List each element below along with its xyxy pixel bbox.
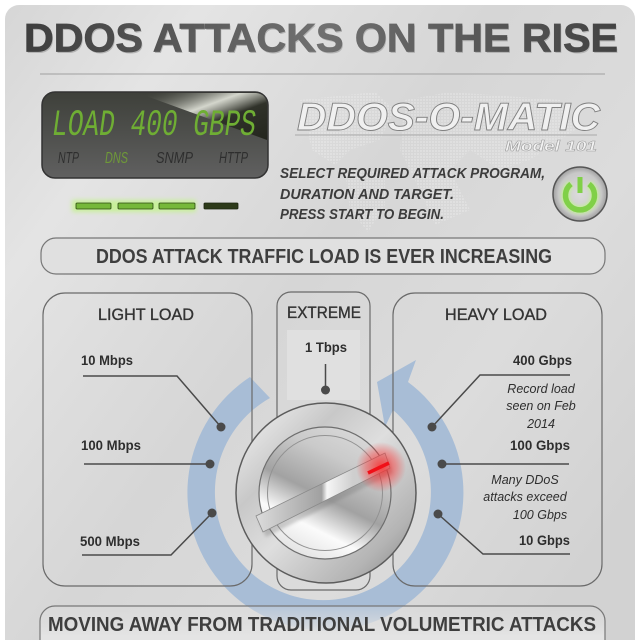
light load labels — [80, 352, 141, 549]
heavy load notes: 2014 — [526, 417, 555, 431]
red glow — [356, 442, 406, 492]
banner: traffic load: DDOS ATTACK TRAFFIC LOAD IS EVER INCREASING — [96, 246, 552, 268]
knob pointer — [256, 453, 390, 532]
banner: moving away — [40, 606, 605, 640]
heavy load labels: 10 Gbps — [519, 532, 570, 548]
heading: EXTREME — [287, 304, 361, 322]
light load connectors — [82, 376, 226, 555]
panel: light load — [43, 293, 252, 586]
model label: Model 101 — [505, 138, 597, 155]
heavy load notes: Many DDoS — [491, 473, 559, 487]
LCD readout: LOAD 400 GBPS — [52, 105, 256, 147]
load level indicators — [72, 200, 238, 212]
instructions: SELECT REQUIRED ATTACK PROGRAM, — [280, 166, 545, 182]
protocol labels: SNMP — [156, 150, 193, 167]
DDOS-O-MATIC logo: DDOS-O-MATIC — [297, 96, 601, 139]
title: DDOS ATTACKS ON THE RISE — [24, 16, 618, 60]
heavy load notes: Record load — [507, 382, 576, 396]
extreme connector — [321, 364, 330, 394]
protocol labels: DNS — [105, 150, 128, 167]
LCD display — [42, 92, 268, 178]
arrow: circular rotation — [187, 360, 463, 631]
red indicator — [368, 463, 389, 473]
panel: heavy load — [393, 293, 602, 586]
protocol labels: HTTP — [219, 150, 248, 167]
instructions — [280, 166, 545, 223]
protocol labels — [58, 150, 248, 167]
light load labels: 500 Mbps — [80, 533, 140, 549]
instructions: DURATION AND TARGET. — [280, 187, 454, 203]
panel: extreme — [277, 292, 370, 590]
icon: power button — [553, 167, 607, 221]
heavy load notes: attacks exceed — [483, 490, 568, 504]
heavy load labels — [510, 352, 572, 548]
heavy load connectors — [428, 375, 570, 554]
heavy load notes — [483, 382, 576, 522]
protocol labels: NTP — [58, 150, 79, 167]
banner: traffic load — [41, 238, 605, 274]
heavy load labels: 100 Gbps — [510, 437, 570, 453]
extreme label: 1 Tbps — [305, 339, 347, 355]
display glare — [138, 93, 267, 140]
heading: LIGHT LOAD — [98, 306, 194, 324]
banner: moving away: MOVING AWAY FROM TRADITIONAL VOLUMETRIC ATTACKS — [48, 614, 596, 636]
title: DDOS ATTACKS ON THE RISE — [25, 18, 619, 62]
heavy load notes: 100 Gbps — [513, 508, 567, 522]
heavy load notes: seen on Feb — [506, 399, 576, 413]
DDOS-O-MATIC logo — [295, 96, 601, 155]
selector knob — [236, 403, 416, 583]
light load labels: 10 Mbps — [81, 352, 133, 368]
heavy load labels: 400 Gbps — [513, 352, 572, 368]
light load labels: 100 Mbps — [81, 437, 141, 453]
heading: HEAVY LOAD — [445, 306, 547, 324]
instructions: PRESS START TO BEGIN. — [280, 207, 444, 223]
knob pointer shadow — [259, 458, 393, 537]
world map watermark — [300, 92, 575, 232]
